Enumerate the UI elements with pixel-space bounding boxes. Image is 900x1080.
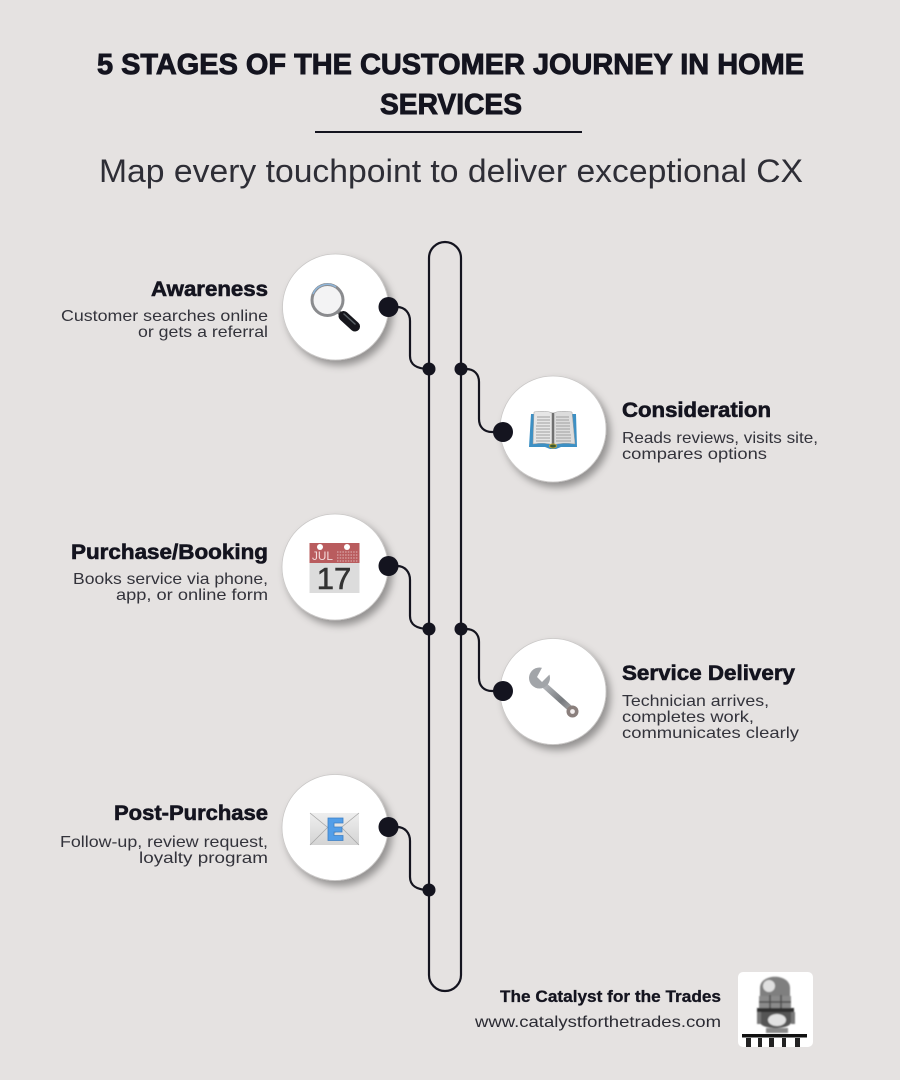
- stage: Consideration: [454, 362, 818, 482]
- stage: Awareness: [61, 254, 436, 376]
- connector: [389, 827, 429, 890]
- title: [97, 49, 804, 121]
- connector start dot: [378, 297, 398, 317]
- track dot: [422, 622, 436, 636]
- Service Delivery text: completes work,: [622, 709, 754, 726]
- Purchase/Booking text: Books service via phone,: [73, 571, 268, 588]
- Service Delivery text: [622, 662, 799, 742]
- footer brand text: [474, 988, 721, 1031]
- Post-Purchase text: loyalty program: [139, 850, 268, 867]
- footer brand text: www.catalystforthetrades.com: [474, 1014, 721, 1031]
- connector start dot: [378, 817, 398, 837]
- footer brand text: The Catalyst for the Trades: [500, 988, 721, 1006]
- subtitle: Map every touchpoint to deliver exceptional CX: [99, 153, 803, 189]
- Purchase/Booking text: Purchase/Booking: [71, 541, 268, 564]
- title: SERVICES: [380, 89, 522, 121]
- icon circle: calendar: [282, 514, 388, 620]
- icon circle: magnifying glass: [282, 254, 388, 360]
- stage: Post-Purchase: [60, 774, 436, 896]
- logo: microphone: [738, 972, 813, 1047]
- connector start dot: [378, 556, 398, 576]
- icon circle: calendar: 17: [317, 561, 351, 596]
- timeline track: [429, 242, 461, 991]
- title underline: [315, 131, 582, 133]
- icon circle: open book: [500, 376, 606, 482]
- icon circle: calendar: JUL: [312, 549, 333, 563]
- track dot: [454, 362, 468, 376]
- Service Delivery text: Service Delivery: [622, 662, 795, 685]
- Awareness text: or gets a referral: [138, 324, 268, 341]
- connector: [461, 369, 503, 432]
- Consideration text: Reads reviews, visits site,: [622, 430, 818, 447]
- track dot: [422, 884, 436, 896]
- connector: [389, 566, 429, 629]
- stage: Purchase/Booking: [71, 514, 436, 636]
- Consideration text: [622, 399, 818, 463]
- stage: Service Delivery: [454, 622, 799, 744]
- Post-Purchase text: [60, 802, 268, 867]
- Service Delivery text: communicates clearly: [622, 725, 799, 742]
- track dot: [454, 622, 468, 636]
- track dot: [422, 362, 436, 376]
- title: 5 STAGES OF THE CUSTOMER JOURNEY IN HOME: [97, 49, 804, 81]
- Awareness text: Awareness: [151, 278, 268, 301]
- connector: [389, 307, 429, 369]
- Post-Purchase text: Post-Purchase: [114, 802, 268, 825]
- Consideration text: compares options: [622, 446, 767, 463]
- Purchase/Booking text: app, or online form: [116, 587, 268, 604]
- connector: [461, 629, 503, 691]
- Post-Purchase text: Follow-up, review request,: [60, 834, 268, 851]
- connector end dot: [493, 422, 513, 442]
- Service Delivery text: Technician arrives,: [622, 693, 769, 710]
- Awareness text: Customer searches online: [61, 308, 268, 325]
- connector end dot: [493, 681, 513, 701]
- Consideration text: Consideration: [622, 399, 771, 422]
- icon circle: wrench: [500, 638, 606, 744]
- Purchase/Booking text: [71, 541, 268, 604]
- icon circle: e-mail envelope: [282, 774, 388, 880]
- Awareness text: [61, 278, 268, 341]
